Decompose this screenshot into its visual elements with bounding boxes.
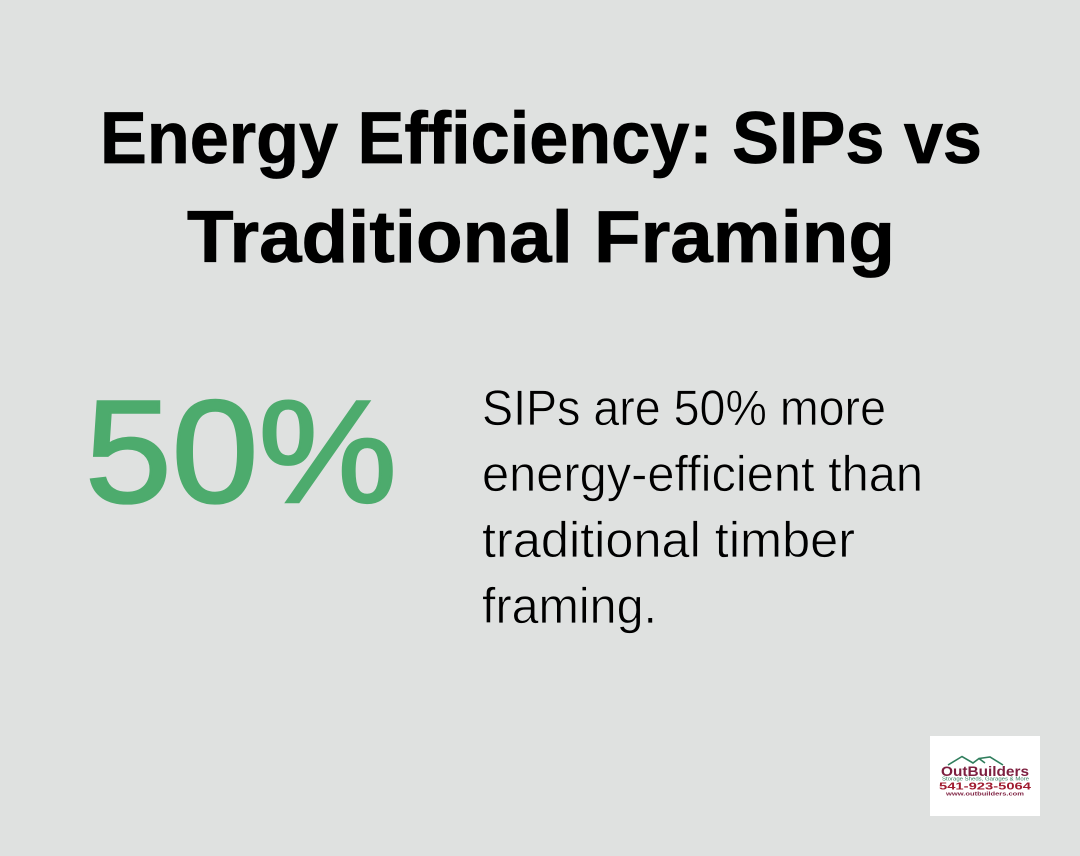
title [100,98,982,278]
description text [482,380,923,634]
title: Energy Efficiency: SIPs vs [100,98,982,179]
big statistic: 50%: 50% [85,370,397,533]
icon: roof lines [948,756,1003,765]
description text: SIPs are 50% more [482,380,886,436]
logo: OutBuilders [930,736,1040,816]
logo tagline: Storage Sheds, Garages & More [942,776,1029,782]
logo website: www.outbuilders.com [945,792,1024,798]
description text: energy-efficient than [482,446,923,502]
title: Traditional Framing [187,197,895,278]
description text: traditional timber [482,512,855,568]
logo name: OutBuilders [941,764,1029,779]
description text: framing. [482,578,657,634]
logo phone: 541-923-5064 [939,782,1032,792]
